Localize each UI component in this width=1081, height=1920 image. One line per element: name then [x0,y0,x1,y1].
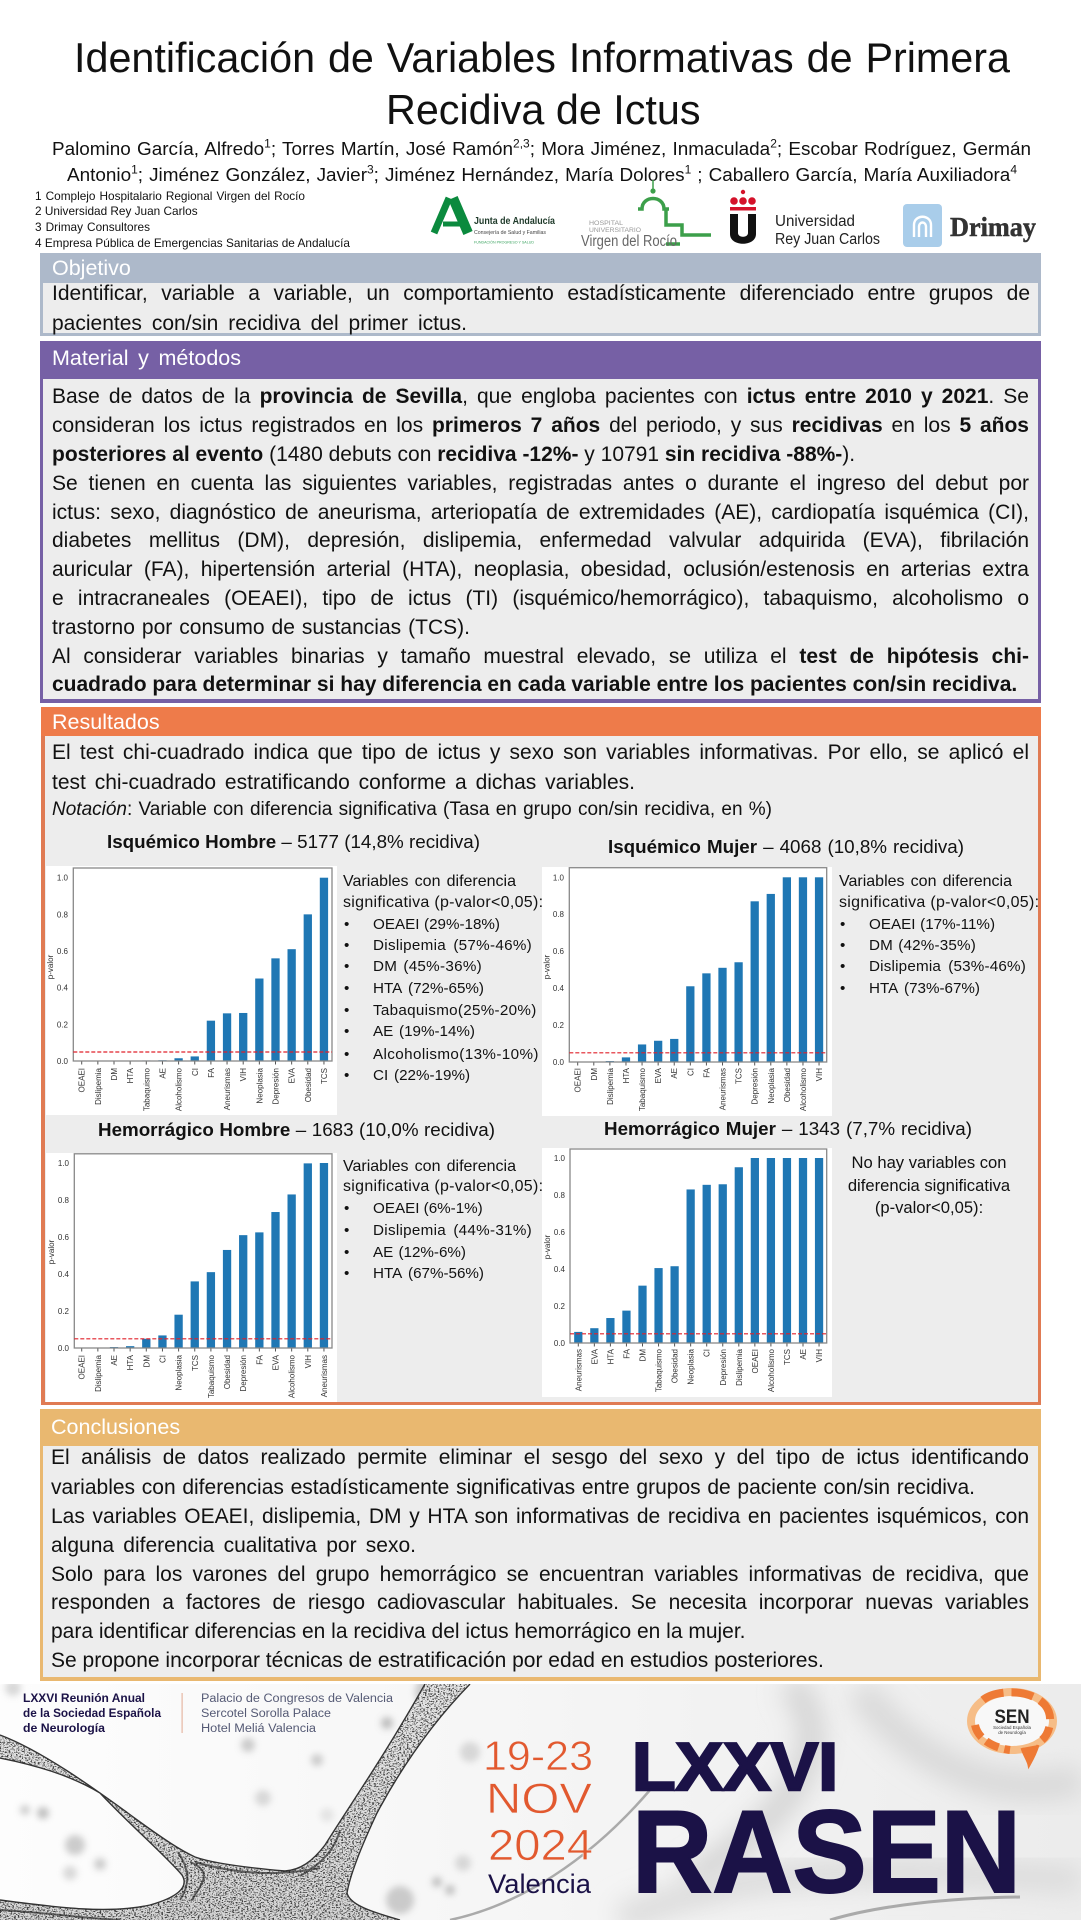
bar chart: isquemico hombre [46,866,337,1115]
list: variables isquemico mujer: • [840,916,845,933]
x axis labels: Neoplasia [175,1354,184,1391]
list: variables hemorragico hombre: Variables con diferencia [343,1158,516,1175]
x axis labels: HTA [606,1348,615,1364]
list: variables hemorragico hombre: HTA (67%-56%) [373,1265,484,1282]
x axis labels: OEAEI [78,1355,87,1379]
x ticks [577,1062,820,1066]
x axis labels: CI [158,1355,168,1363]
y axis labels: 1.0 [57,874,69,883]
banner background [0,1674,1081,1920]
y axis labels: 0.8 [57,910,69,919]
y axis labels: p-valor [47,1239,56,1264]
x axis labels: FA [255,1354,264,1365]
affiliation 2: 2 Universidad Rey Juan Carlos [35,204,198,218]
plot frame [569,868,827,1062]
dates: NOV [486,1775,592,1823]
x axis labels: Tabaquismo [207,1354,216,1398]
list: variables isquemico hombre: HTA (72%-65%) [373,980,484,997]
list: variables hemorragico hombre: OEAEI (6%-1%) [373,1200,483,1217]
plot frame [73,868,332,1061]
x axis labels: HTA [622,1067,631,1083]
x axis labels: AE [110,1355,119,1366]
x axis labels: Dislipemia [735,1348,744,1386]
list: variables isquemico hombre: • [344,1002,350,1019]
x axis labels: Alcoholismo [767,1348,776,1392]
y axis labels: 0.2 [554,1302,566,1311]
y axis labels: 0.4 [554,1265,566,1274]
material text block: trastorno por consumo de sustancias (TCS). [52,616,470,638]
x axis labels: Tabaquismo [638,1067,647,1111]
conclusiones text block: Las variables OEAEI, dislipemia, DM y HTA son informativas de recidiva en pacientes isquémicos, con [51,1504,1029,1528]
affiliation 3: 3 Drimay Consultores [35,220,150,234]
event info: de la Sociedad Española [23,1708,162,1720]
heading: material y metodos: Material y métodos [52,346,241,370]
list: variables isquemico mujer [839,873,1039,997]
x axis labels: Tabaquismo [142,1067,151,1111]
x axis labels: FA [702,1067,711,1078]
heading: objetivo: Objetivo [52,256,131,280]
bar chart: hemorragico mujer [542,1148,832,1397]
bars [78,1163,328,1348]
x axis labels: Aneurismas [574,1349,583,1391]
panel: material y metodos [40,341,1041,703]
conclusiones text block: Solo para los varones del grupo hemorrágico se encuentran variables informativas de recidiva, que [51,1562,1029,1586]
y axis labels [543,1154,566,1348]
logo: Junta de Andalucía [434,198,555,244]
x axis labels [574,1348,824,1392]
material text block: e intracraneales (OEAEI), tipo de ictus (TI) (isquémico/hemorrágico), tabaquismo, alcoholismo o [52,586,1029,610]
x ticks [81,1062,325,1064]
dates: 2024 [488,1821,593,1870]
material text block [52,384,1029,696]
authors line 1: Palomino García, Alfredo1; Torres Martín, José Ramón2,3; Mora Jiménez, Inmaculada2; Escobar Rodríguez, Germán [52,137,1031,160]
logo: Hospital Virgen del Rocío: Virgen del Rocío [581,233,677,250]
title [74,35,1010,133]
note: sin variables hemorragico mujer [848,1153,1010,1217]
resultados text line 2: test chi-cuadrado estratificando conforme a dichas variables. [52,770,635,794]
y axis labels: 0.4 [58,1270,70,1279]
conclusiones text block: variables con diferencias estadísticamente significativas entre grupos de paciente con/sin recidiva. [51,1476,975,1498]
conclusiones body background [43,1446,1038,1677]
x axis labels: TCS [735,1068,744,1084]
y axis labels: 1.0 [554,1154,566,1163]
subheading: isquemico mujer: Isquémico Mujer – 4068 (10,8% recidiva) [608,836,964,857]
x axis labels [574,1067,824,1111]
y axis labels: 0.6 [57,947,69,956]
y axis labels [47,1159,70,1353]
material text block: Base de datos de la provincia de Sevilla, que engloba pacientes con ictus entre 2010 y 2021. Se [52,384,1029,408]
list: variables hemorragico hombre: • [344,1265,349,1282]
material text block: diabetes mellitus (DM), depresión, dislipemia, enfermedad valvular adquirida (EVA), fibrilación [52,528,1029,552]
list: variables hemorragico hombre: • [344,1244,349,1261]
x axis labels [78,1354,329,1398]
x axis labels: EVA [272,1354,280,1370]
conclusiones text block: Se propone incorporar técnicas de estratificación por edad en estudios posteriores. [51,1648,824,1672]
objetivo text line 1: Identificar, variable a variable, un comportamiento estadísticamente diferenciado entre grupos de [52,282,1030,304]
x ticks [578,1344,820,1346]
y axis labels: 0.8 [554,1191,566,1200]
logo: Hospital Virgen del Rocío: HOSPITAL [589,220,623,227]
y axis labels: 0.2 [58,1307,70,1316]
y axis labels: 1.0 [553,873,565,882]
conclusiones text block: responden a factores de riesgo cadiovascular habituales. Se necesita incorporar nuevas variables [51,1590,1029,1614]
y axis labels: p-valor [46,954,55,979]
x axis labels: Alcoholismo [799,1067,808,1111]
x axis labels: Neoplasia [767,1067,776,1104]
list: variables hemorragico hombre [343,1158,543,1282]
threshold line [73,1051,332,1053]
panel: conclusiones [40,1409,1041,1681]
list: variables isquemico mujer: OEAEI (17%-11%) [869,916,995,933]
footer banner: LXXVI RASEN [0,1684,1081,1920]
logo: Drimay [903,204,1036,247]
y axis labels [46,874,69,1066]
panel: resultados [41,707,1041,1405]
y axis labels: 0.6 [553,947,565,956]
logo: SEN: Sociedad Española [993,1725,1031,1730]
list: variables hemorragico hombre: Dislipemia (44%-31%) [373,1222,532,1239]
material text block: consideran los ictus registrados en los primeros 7 años del periodo, y sus recidivas en los 5 años [52,414,1029,436]
logo: Universidad Rey Juan Carlos [730,190,880,248]
venues: Palacio de Congresos de Valencia [201,1693,394,1705]
x axis labels: AE [670,1068,679,1079]
list: variables isquemico mujer: • [840,958,846,975]
list: variables hemorragico hombre: • [344,1222,350,1239]
title line 1: Identificación de Variables Informativas de Primera [74,35,1010,81]
list: variables isquemico hombre: DM (45%-36%) [373,958,482,975]
bars [78,878,328,1061]
x axis labels [78,1067,329,1111]
list: variables isquemico hombre: • [344,1067,349,1084]
logo: Universidad Rey Juan Carlos: Rey Juan Carlos [775,231,880,248]
note: sin variables hemorragico mujer: (p-valor<0,05): [875,1198,983,1217]
material text block: auricular (FA), hipertensión arterial (HTA), neoplasia, obesidad, oclusión/estenosis en arterias extra [52,558,1029,580]
material text block: Se tienen en cuenta las siguientes variables, registradas antes o durante el ingreso del debut por [52,472,1029,494]
list: variables isquemico hombre: • [344,937,350,954]
venues: Hotel Meliá Valencia [201,1723,317,1735]
material text block: posteriores al evento (1480 debuts con recidiva -12%- y 10791 sin recidiva -88%-). [52,442,855,466]
resultados body background [45,736,1038,1402]
y axis labels: 0.6 [554,1228,566,1237]
y axis labels: 0.0 [57,1057,69,1066]
list: variables isquemico hombre: Tabaquismo(25%-20%) [373,1002,537,1019]
list: variables isquemico hombre: • [344,916,349,933]
list: variables isquemico hombre: • [344,958,350,975]
y axis labels: 0.4 [553,984,565,993]
list: variables isquemico hombre: Variables con diferencia [343,873,516,890]
x axis labels: OEAEI [751,1349,760,1373]
threshold line [74,1338,332,1340]
list: variables isquemico hombre [343,873,543,1084]
x axis labels: Aneurismas [223,1068,232,1110]
bars [574,877,823,1062]
x axis labels: CI [703,1349,712,1357]
list: variables isquemico mujer: • [840,980,845,997]
note: sin variables hemorragico mujer: No hay variables con [852,1153,1006,1172]
wordmark: LXXVI: LXXVI [632,1729,838,1805]
x axis labels: DM [142,1355,151,1367]
x axis labels: FA [207,1067,216,1078]
neuron image [0,1684,480,1920]
list: variables isquemico mujer: significativa (p-valor<0,05): [839,894,1039,911]
y axis labels: 0.0 [553,1058,565,1067]
list: variables isquemico mujer: Dislipemia (53%-46%) [869,958,1026,975]
x axis labels: HTA [126,1067,135,1083]
list: variables hemorragico hombre: significativa (p-valor<0,05): [343,1178,543,1195]
logo: Junta de Andalucía: Junta de Andalucía [474,216,555,227]
y axis labels: p-valor [543,1234,552,1259]
x axis labels: CI [686,1068,695,1076]
logo: Hospital Virgen del Rocío [581,180,711,250]
affiliation 1: 1 Complejo Hospitalario Regional Virgen del Rocío [35,189,305,203]
heading: conclusiones: Conclusiones [51,1415,180,1439]
x axis labels: Obesidad [671,1349,680,1383]
x axis labels: CI [191,1068,200,1076]
event info: de Neurología [23,1723,106,1735]
conclusiones text block: para identificar diferencias en la recidiva del ictus hemorrágico en la mujer. [51,1620,746,1642]
dates: 19-23 [483,1732,593,1779]
list: variables isquemico mujer: • [840,937,846,954]
conclusiones text block: El análisis de datos realizado permite eliminar el sesgo del sexo y del tipo de ictus identificando [51,1446,1029,1468]
list: variables isquemico mujer: HTA (73%-67%) [869,980,980,997]
venues [182,1693,394,1735]
logo: Junta de Andalucía: FUNDACIÓN PROGRESO Y SALUD [474,240,534,244]
y axis labels: 1.0 [58,1159,70,1168]
list: variables isquemico hombre: • [344,1046,350,1063]
x axis labels: TCS [320,1068,329,1084]
x axis labels: Dislipemia [94,1354,103,1392]
x axis labels: DM [638,1349,648,1361]
resultados header band [41,707,1041,736]
x axis labels: EVA [590,1348,599,1364]
affiliation 4: 4 Empresa Pública de Emergencias Sanitarias de Andalucía [35,236,350,250]
authors line 2: Antonio1; Jiménez González, Javier3; Jiménez Hernández, María Dolores1 ; Caballero García, María Auxiliadora4 [67,163,1017,186]
x axis labels: VIH [815,1068,824,1081]
logo: Hospital Virgen del Rocío: UNIVERSITARIO [589,227,641,234]
x axis labels: TCS [191,1355,200,1371]
y axis labels: 0.8 [58,1196,70,1205]
x axis labels: HTA [126,1354,135,1370]
x axis labels: Obesidad [223,1355,232,1389]
resultados text line 1: El test chi-cuadrado indica que tipo de ictus y sexo son variables informativas. Por ello, se aplicó el [52,740,1029,764]
x axis labels: Neoplasia [687,1348,696,1385]
bar chart: isquemico mujer [542,867,832,1116]
x axis labels: VIH [815,1349,824,1362]
list: variables hemorragico hombre: • [344,1200,349,1217]
y axis labels: 0.6 [58,1233,70,1242]
logos row [430,180,1036,250]
list: variables isquemico hombre: CI (22%-19%) [373,1067,470,1084]
x axis labels: DM [110,1068,119,1080]
heading: resultados: Resultados [52,710,160,734]
logo: SEN [971,1692,1053,1765]
x axis labels: Depresión [272,1068,280,1104]
material text block: Al considerar variables binarias y tamaño muestral elevado, se utiliza el test de hipótesis chi- [52,644,1029,668]
list: variables isquemico hombre: significativa (p-valor<0,05): [343,894,543,911]
bars [574,1158,823,1343]
panel: objetivo [40,253,1041,336]
x axis labels: Aneurismas [320,1355,329,1397]
note: sin variables hemorragico mujer: diferencia significativa [848,1176,1010,1195]
material text block: ictus: sexo, diagnóstico de aneurisma, arteriopatía de extremidades (AE), cardiopatía isquémica (CI), [52,500,1029,524]
plot frame [74,1154,332,1348]
threshold line [569,1052,827,1054]
title line 2: Recidiva de Ictus [386,87,700,133]
material text block: cuadrado para determinar si hay diferencia en cada variable entre los pacientes con/sin recidiva. [52,672,1017,696]
list: variables isquemico mujer: Variables con diferencia [839,873,1012,890]
x axis labels: Dislipemia [94,1067,103,1105]
y axis labels: 0.8 [553,910,565,919]
x axis labels: Depresión [719,1349,728,1385]
material body background [43,379,1038,699]
list: variables isquemico hombre: • [344,1023,349,1040]
x axis labels: Depresión [751,1068,760,1104]
venues: Sercotel Sorolla Palace [201,1708,331,1720]
x axis labels: OEAEI [78,1068,87,1092]
event info [23,1693,162,1735]
conclusiones text block: alguna diferencia cualitativa por sexo. [51,1534,416,1556]
x axis labels: Neoplasia [255,1067,264,1104]
list: variables hemorragico hombre: AE (12%-6%) [373,1244,466,1261]
x ticks [81,1348,325,1352]
x axis labels: FA [622,1348,632,1359]
x axis labels: Obesidad [783,1068,792,1102]
objetivo text line 2: pacientes con/sin recidiva del primer ictus. [52,312,467,334]
x axis labels: EVA [654,1067,663,1083]
conclusiones text block [51,1446,1029,1672]
list: variables isquemico hombre: • [344,980,349,997]
list: variables isquemico hombre: OEAEI (29%-18%) [373,916,500,933]
y axis labels: p-valor [542,954,552,979]
subheading: hemorragico hombre: Hemorrágico Hombre – 1683 (10,0% recidiva) [98,1119,495,1140]
subheading: hemorragico mujer: Hemorrágico Mujer – 1343 (7,7% recidiva) [604,1118,972,1139]
list: variables isquemico hombre: Alcoholismo(13%-10%) [373,1046,539,1063]
x axis labels: Dislipemia [606,1067,615,1105]
threshold line [570,1333,827,1335]
x axis labels: AE [158,1068,168,1079]
city: Valencia [488,1869,592,1899]
bar chart: hemorragico hombre [46,1153,337,1402]
x axis labels: Alcoholismo [175,1067,184,1111]
dates [483,1732,593,1870]
list: variables isquemico hombre: AE (19%-14%) [373,1023,475,1040]
subheading: isquemico hombre: Isquémico Hombre – 5177 (14,8% recidiva) [107,831,480,852]
logo: SEN: SEN [994,1707,1030,1728]
notation line: Notación: Variable con diferencia significativa (Tasa en grupo con/sin recidiva, en %) [52,798,772,820]
logo: SEN: de Neurología [998,1730,1026,1735]
y axis labels: 0.0 [58,1344,70,1353]
event info: LXXVI Reunión Anual [23,1693,145,1705]
y axis labels: 0.2 [57,1020,69,1029]
x axis labels: EVA [288,1067,297,1083]
x axis labels: Tabaquismo [655,1348,664,1392]
y axis labels: 0.4 [57,984,69,993]
x axis labels: Aneurismas [718,1068,728,1110]
x axis labels: AE [799,1349,808,1360]
y axis labels: 0.0 [554,1339,566,1348]
list: variables isquemico hombre: Dislipemia (57%-46%) [373,937,532,954]
x axis labels: Alcoholismo [288,1354,297,1398]
objetivo body background [43,283,1038,333]
x axis labels: Obesidad [304,1068,313,1102]
list: variables isquemico mujer: DM (42%-35%) [869,937,976,954]
x axis labels: TCS [783,1349,792,1365]
logo: Universidad Rey Juan Carlos: Universidad [775,213,855,230]
wordmark: RASEN: RASEN [632,1786,1021,1917]
x axis labels: DM [590,1068,599,1080]
x axis labels: Depresión [239,1355,248,1391]
x axis labels: OEAEI [574,1068,583,1092]
plot frame [570,1149,827,1343]
y axis labels [542,873,565,1067]
x axis labels: VIH [304,1355,313,1368]
authors [52,137,1031,186]
y axis labels: 0.2 [553,1021,565,1030]
x axis labels: VIH [239,1068,248,1081]
logo: Drimay: Drimay [950,212,1036,242]
logo: Junta de Andalucía: Consejería de Salud y Familias [474,230,547,236]
affiliations [35,189,350,250]
